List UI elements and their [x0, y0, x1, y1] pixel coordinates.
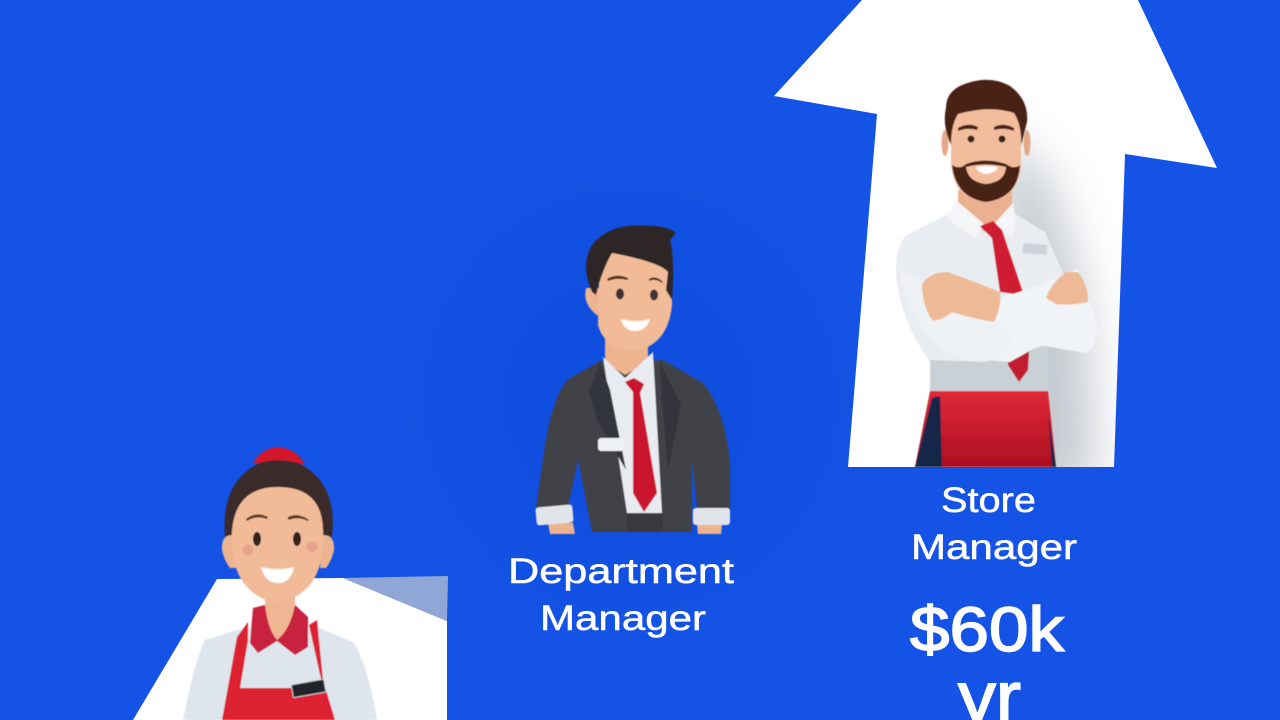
label: department manager [508, 552, 734, 638]
label: store manager [911, 481, 1077, 567]
collar [946, 201, 1016, 238]
crossed arms [900, 268, 1097, 362]
name badge [291, 679, 326, 698]
brows [246, 514, 309, 521]
head [585, 225, 676, 351]
face [232, 487, 323, 602]
hat [253, 447, 305, 464]
eyes [968, 136, 974, 142]
name badge [1023, 243, 1047, 255]
beard [952, 160, 1020, 202]
smile [621, 319, 650, 331]
eyes [616, 288, 624, 300]
label: department manager: Manager [540, 599, 706, 638]
apron [915, 391, 1056, 467]
name badge [598, 438, 624, 451]
panel: department manager step [508, 225, 734, 638]
label: department manager: Department [508, 552, 734, 591]
panel: entry-level worker step [133, 447, 448, 720]
collar [250, 605, 308, 655]
tie [980, 221, 1029, 382]
belt area [627, 514, 663, 532]
shirt [603, 352, 662, 513]
label: store manager: Store [941, 481, 1036, 520]
jacket [536, 360, 730, 532]
figure: store manager [896, 80, 1097, 467]
tie [625, 378, 657, 512]
smile [976, 166, 998, 174]
ears [222, 535, 334, 568]
hair [945, 80, 1027, 146]
hair [224, 460, 333, 537]
brows [607, 276, 663, 283]
head [942, 80, 1030, 202]
arrow: white upward arrow [774, 0, 1217, 490]
arrow: white arrow fragment [133, 576, 448, 720]
salary: $60k / yr [910, 595, 1065, 720]
neck [958, 190, 1012, 232]
smile [261, 567, 294, 583]
apron [222, 620, 335, 720]
label: store manager: Manager [911, 528, 1077, 567]
brows [958, 125, 1014, 131]
lapels [589, 362, 681, 470]
neck [605, 335, 648, 375]
neck [265, 595, 295, 640]
cheeks [242, 544, 254, 556]
eyes [253, 532, 261, 546]
shirt torso [896, 212, 1075, 392]
salary: $60k / yr: $60k [910, 595, 1065, 665]
shirt [183, 627, 377, 720]
figure: crew member [183, 447, 377, 720]
panel: store manager step [774, 0, 1217, 720]
cuffs and hands [535, 504, 730, 534]
figure: department manager [535, 225, 730, 534]
hair [586, 225, 676, 300]
